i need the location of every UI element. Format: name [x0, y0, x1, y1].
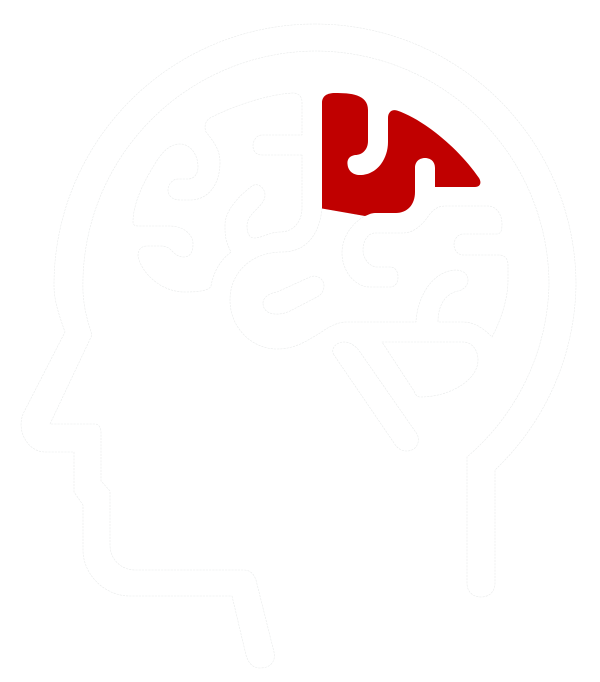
- brain: fissure pill: [263, 276, 324, 314]
- brain: left lobes outline: [133, 93, 302, 292]
- brain stem bar: [333, 342, 418, 451]
- cerebellum: [382, 342, 478, 397]
- brain: central lobes outline: [230, 206, 508, 349]
- highlighted red lobe: [322, 93, 480, 216]
